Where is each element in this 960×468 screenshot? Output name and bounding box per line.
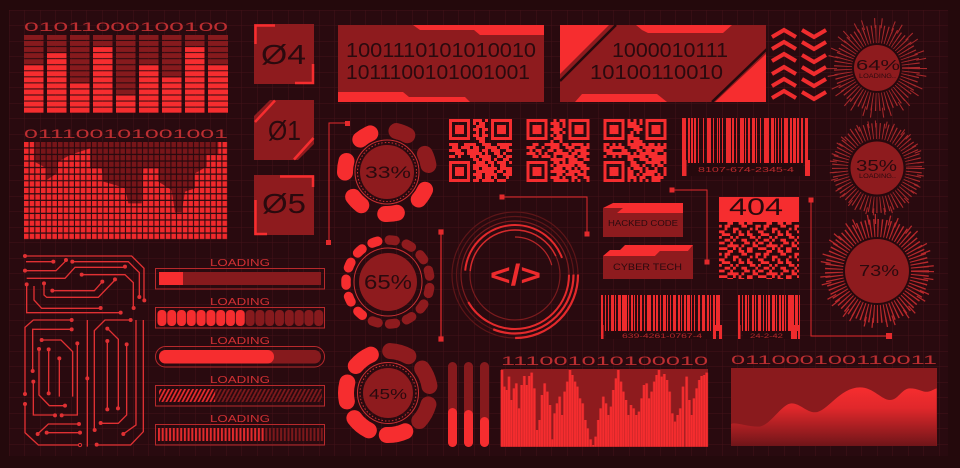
panel: 05: Ø5 (262, 188, 306, 219)
barcode: 8107-674-2345-4: 8107-674-2345-4 (698, 165, 794, 174)
equalizer panel (24, 22, 228, 113)
panel: 04: Ø4 (261, 39, 306, 70)
QR code one (449, 120, 512, 180)
spike chart binary label: 111001010100010 (501, 356, 708, 368)
barcode: 8107-674-2345-4 (682, 140, 810, 176)
label: loading 3: LOADING (210, 335, 270, 347)
rounded progress bar (156, 346, 324, 367)
gauge: 65 percent ring (329, 223, 447, 341)
equalizer binary label: 01011000100100 (24, 22, 228, 34)
loading bars (156, 257, 324, 445)
gauge: 35 percent sunburst: LOADING.. (859, 174, 896, 180)
equalizer bars (24, 35, 228, 113)
gauge: 45 percent ring: 45% (369, 386, 407, 403)
404 panel (719, 194, 799, 279)
gauge: 33 percent ring (331, 116, 443, 228)
banner: binary two (560, 25, 767, 102)
gauge: 64 percent sunburst (832, 23, 922, 113)
label: loading 5: LOADING (210, 413, 270, 425)
banner: binary two: 10100110010 (590, 62, 723, 84)
vertical level bars (448, 362, 489, 447)
connector node (670, 188, 710, 264)
icon: down chevrons (802, 30, 826, 99)
label: loading 1: LOADING (210, 257, 270, 269)
connector: upper left bracket (329, 123, 347, 242)
area chart binary label: 011000100110011 (731, 355, 937, 367)
connector node (808, 198, 892, 339)
connector: to 73 percent gauge (811, 200, 889, 336)
gauge: 33 percent ring: 33% (365, 163, 411, 182)
404 panel: 404 (729, 194, 783, 221)
striped progress bar (156, 424, 324, 445)
tag: cyber tech (603, 245, 693, 279)
panel: 05 (254, 175, 314, 235)
panel: 04 (254, 24, 314, 84)
tag: hacked code (603, 203, 683, 237)
central code dial (452, 212, 578, 338)
area curve (731, 387, 937, 446)
map binary label: 011100101001001 (24, 129, 228, 141)
panel: 01: Ø1 (268, 115, 301, 146)
dot world map panel (24, 129, 228, 240)
dot matrix (24, 142, 228, 240)
map silhouette (34, 142, 218, 212)
barcode: 639-4261-0767-4 (601, 313, 722, 340)
hatched progress bar (156, 386, 324, 406)
solid progress bar (156, 268, 324, 289)
tag: hacked code: HACKED CODE (608, 218, 678, 228)
gauge: 65 percent ring: 65% (364, 272, 412, 294)
QR code three (605, 119, 665, 182)
label: loading 2: LOADING (210, 296, 270, 308)
gauge: 64 percent sunburst: 64% (856, 57, 900, 74)
gauge: 35 percent sunburst: 35% (856, 158, 897, 175)
banner: binary two: 1000010111 (612, 40, 728, 62)
banner: binary one (338, 25, 544, 102)
banner: binary one: 1011100101001001 (346, 62, 530, 84)
gauge: 45 percent ring (332, 337, 444, 449)
QR code two (526, 120, 590, 180)
icon: code brackets: </> (490, 259, 541, 292)
circuit traces (25, 256, 144, 447)
label: loading 4: LOADING (210, 374, 270, 386)
gauge: 35 percent sunburst (833, 124, 921, 212)
pill progress bar (156, 308, 324, 328)
panel: 01 (254, 100, 314, 160)
connector: vertical line by centre dial (439, 230, 443, 341)
connector: above centre dial (502, 197, 587, 234)
barcode: 24-2-42 (738, 313, 800, 340)
barcode: 639-4261-0767-4: 639-4261-0767-4 (622, 333, 703, 340)
icon: up chevrons (772, 30, 796, 98)
tag: cyber tech: CYBER TECH (613, 262, 682, 272)
banner: binary one: 1001110101010010 (346, 40, 536, 62)
gauge: 73 percent sunburst (825, 219, 929, 323)
connector node (500, 194, 590, 236)
connector node (345, 121, 350, 126)
gauge: 64 percent sunburst: LOADING.. (859, 74, 896, 80)
barcode: 24-2-42: 24-2-42 (750, 333, 784, 340)
gauge: 73 percent sunburst: 73% (859, 263, 899, 280)
spike bars (502, 370, 707, 447)
spike chart panel (501, 356, 708, 447)
connector: by tag boxes (672, 190, 707, 262)
area chart panel (731, 355, 937, 446)
connector node (326, 240, 331, 245)
